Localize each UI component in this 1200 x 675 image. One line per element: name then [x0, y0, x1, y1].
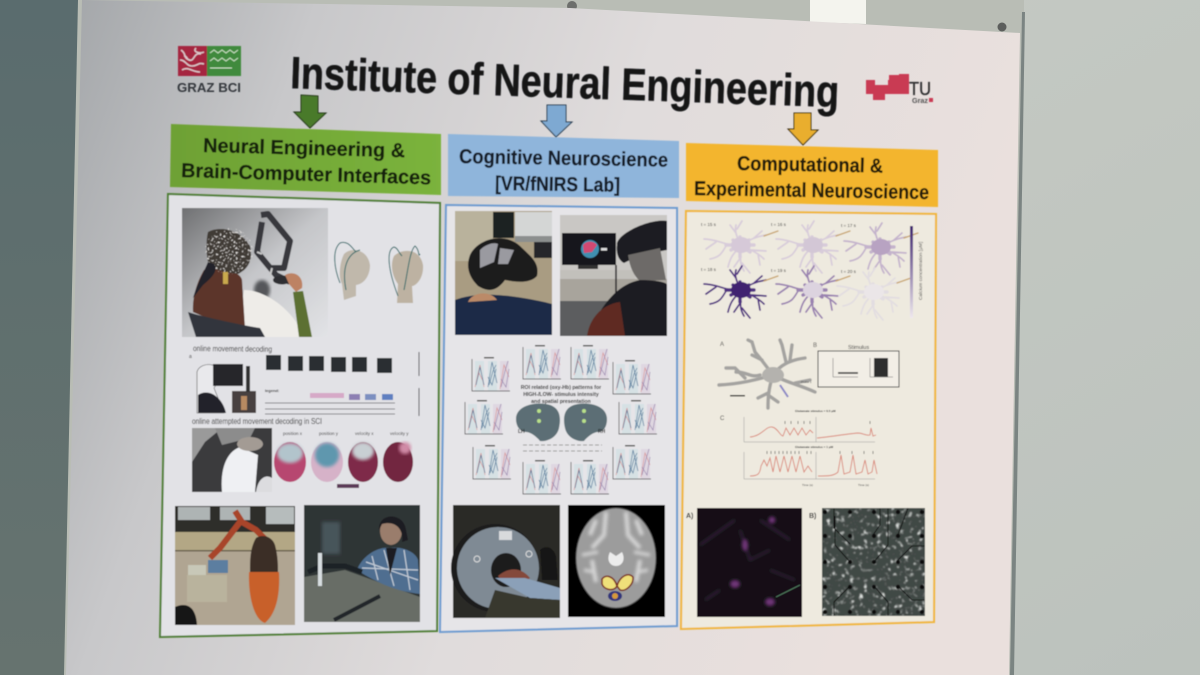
panel header: blue	[448, 134, 679, 198]
illustration: brains LH RH: LH	[518, 429, 525, 435]
panel header: orange: Experimental Neuroscience	[694, 178, 929, 204]
chart: calcium astrocyte time series: Calcium concentration [μM]	[918, 242, 924, 300]
photo: VR headset participant	[455, 211, 552, 335]
image: grey microscopy network	[822, 508, 925, 616]
panel header: blue: Cognitive Neuroscience	[459, 146, 668, 172]
panel header: blue: [VR/fNIRS Lab]	[495, 173, 620, 197]
photo: VR with brain on screen	[560, 215, 667, 336]
chart: stimulus	[813, 343, 899, 387]
poster sheet	[66, 0, 1020, 675]
chart: brain decoding maps: position y	[319, 431, 339, 436]
chart: calcium traces	[720, 409, 877, 487]
chart: calcium astrocyte time series: t = 19 s	[771, 268, 787, 273]
chart: calcium astrocyte time series: t = 17 s	[841, 223, 857, 228]
title: Institute of Neural Engineering	[290, 47, 840, 117]
illustration: astrocyte morphology A: A	[720, 342, 724, 348]
chart: calcium traces: Time (s)	[802, 483, 813, 487]
label: A): A)	[686, 513, 693, 520]
chart: brain decoding maps	[274, 431, 413, 488]
heading: online movement decoding: online movement decoding	[193, 344, 272, 354]
chart: brain decoding maps: velocity y	[390, 431, 409, 436]
chart: calcium astrocyte time series: t = 18 s	[701, 267, 717, 272]
pins	[567, 1, 1006, 32]
illustration: astrocyte morphology A: Probe 1	[801, 380, 812, 384]
chart: calcium astrocyte time series: t = 20 s	[841, 269, 857, 274]
photo: SCI participant	[192, 428, 272, 492]
logo: Graz BCI: GRAZ BCI	[177, 81, 241, 95]
figure: movement decoding: legend:	[265, 388, 279, 393]
chart: brain decoding maps: position x	[283, 431, 303, 436]
logo: Graz BCI	[177, 46, 241, 95]
chart: ROI time courses	[465, 345, 657, 494]
heading: ROI patterns: HIGH-/LOW- stimulus intensity	[523, 392, 599, 398]
panel header: orange: Computational &	[737, 153, 883, 178]
arrow: blue	[541, 105, 572, 137]
chart: brain decoding maps: velocity x	[355, 431, 374, 436]
chart: calcium traces: Glutamate stimulus = 1 μM	[795, 445, 834, 449]
arrow: orange	[788, 113, 818, 145]
panel: neural engineering	[160, 194, 440, 637]
label: B): B)	[809, 513, 816, 520]
panel header: green: Neural Engineering &	[203, 135, 405, 162]
panel header: orange	[686, 143, 938, 207]
arrow: green	[294, 95, 326, 128]
heading: ROI patterns: ROI related (oxy-Hb) patterns for	[521, 385, 601, 391]
image: brain scan	[568, 505, 665, 617]
chart: calcium astrocyte time series: t = 15 s	[701, 222, 717, 227]
photo: MRI scanner	[451, 505, 560, 618]
figure: movement decoding	[189, 352, 419, 416]
chart: calcium traces: Time (s)	[858, 483, 869, 487]
illustration: head models	[335, 242, 423, 303]
panel header: green: Brain-Computer Interfaces	[181, 160, 431, 189]
heading: online attempted movement decoding in SCI: online attempted movement decoding in SCI	[192, 417, 322, 426]
chart: calcium astrocyte time series	[701, 221, 924, 320]
chart: calcium astrocyte time series: t = 16 s	[771, 222, 787, 227]
illustration: brains LH RH	[516, 404, 607, 451]
heading: ROI patterns: and spatial presentation	[531, 399, 591, 405]
heading: ROI patterns	[521, 385, 601, 405]
figure: movement decoding: a	[189, 354, 192, 360]
photo: participant with EEG cap	[304, 505, 420, 622]
logo: TU Graz: Graz	[912, 96, 928, 105]
photo: user with robot arm	[182, 208, 328, 337]
panel: cognitive neuroscience	[440, 205, 677, 632]
chart: calcium traces: Glutamate stimulus = 0.5 μM	[795, 409, 836, 413]
logo: TU Graz: TU	[909, 79, 931, 99]
logo: TU Graz	[866, 74, 933, 105]
chart: stimulus: B	[813, 343, 817, 349]
chart: stimulus: Stimulus	[848, 345, 869, 351]
illustration: astrocyte morphology A	[719, 340, 815, 408]
chart: calcium traces: C	[720, 416, 725, 422]
illustration: brains LH RH: RH	[598, 429, 606, 435]
panel: computational neuroscience	[681, 211, 936, 629]
photo: robot arm with hand orthosis	[175, 506, 295, 625]
panel header: green	[170, 124, 441, 195]
image: purple astrocyte micrograph	[697, 508, 802, 617]
